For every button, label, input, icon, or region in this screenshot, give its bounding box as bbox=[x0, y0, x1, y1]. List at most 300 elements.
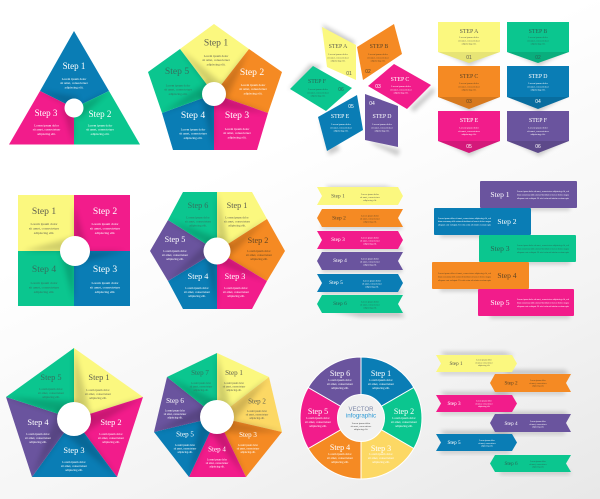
step 1: Lorem ipsum dolor bbox=[30, 222, 58, 226]
small ribbon 5 bbox=[436, 434, 517, 451]
ribbon 4: Step 4 bbox=[333, 258, 347, 264]
ribbon 6: Step 6 bbox=[333, 301, 347, 307]
step 2 bbox=[86, 109, 115, 136]
card C: STEP C bbox=[460, 74, 478, 80]
step 5: sit amet, consectetuer bbox=[38, 391, 64, 396]
card A: sit amet, consectetuer bbox=[458, 39, 480, 42]
tile E: Lorem ipsum dolor bbox=[331, 123, 351, 126]
step 1: adipiscing elit. bbox=[228, 224, 246, 228]
step 1: sit amet, consectetuer bbox=[85, 392, 111, 397]
step 3: adipiscing elit. bbox=[372, 460, 390, 464]
ribbon 2: Step 2 bbox=[332, 216, 346, 222]
ribbon 2: Lorem ipsum dolor bbox=[361, 216, 379, 218]
card F: 06 bbox=[535, 144, 541, 150]
ribbon 3: sit amet, consectetuer bbox=[360, 240, 380, 242]
card C: sit amet, consectetuer bbox=[458, 85, 480, 88]
tile B: Lorem ipsum dolor bbox=[368, 53, 388, 56]
panel: pentagon diagram bottom bbox=[6, 348, 143, 477]
card C bbox=[438, 66, 500, 109]
step 1: adipiscing elit. bbox=[207, 62, 226, 66]
step 2: adipiscing elit. bbox=[244, 91, 263, 95]
step 5: sit amet, consectetuer bbox=[174, 448, 196, 450]
step 3: Lorem ipsum dolor bbox=[238, 444, 258, 447]
step 3: Step 3 bbox=[371, 444, 391, 453]
tile A: 01 bbox=[346, 71, 352, 77]
step 4: Lorem ipsum dolor bbox=[185, 286, 209, 290]
step 3: sit amet, consectetuer bbox=[368, 456, 394, 461]
step 5: Lorem ipsum dolor bbox=[306, 416, 330, 420]
step 2: adipiscing elit. bbox=[91, 132, 110, 136]
card A bbox=[438, 22, 500, 63]
step 3 bbox=[90, 264, 121, 294]
tile D: adipiscing elit. bbox=[375, 130, 390, 133]
ribbon 5 bbox=[317, 274, 403, 292]
card D: STEP D bbox=[529, 74, 547, 80]
step 1: sit amet, consectetuer bbox=[29, 226, 60, 232]
step 2 bbox=[239, 67, 268, 95]
step 3: sit amet, consectetuer bbox=[61, 464, 87, 469]
step 4: Lorem ipsum dolor bbox=[26, 432, 50, 436]
step 4: sit amet, consectetuer bbox=[29, 286, 60, 290]
bar 4: aliquam erat volutpat. Ut wisi enim ad minim veniam quis bbox=[438, 279, 491, 282]
step 1: Lorem ipsum dolor bbox=[86, 388, 110, 392]
small ribbon 5: sit amet, consectetuer bbox=[478, 443, 496, 445]
small ribbon 1: sit amet, consectetuer bbox=[475, 362, 493, 364]
tile B bbox=[365, 44, 389, 75]
step 1: adipiscing elit. bbox=[65, 85, 84, 89]
step 1: Lorem ipsum dolor bbox=[204, 54, 228, 58]
small ribbon 4: adipiscing elit. bbox=[532, 426, 544, 429]
step 3: Lorem ipsum dolor bbox=[62, 460, 86, 464]
step 2: sit amet, consectetuer bbox=[98, 436, 124, 441]
card A: Lorem ipsum dolor bbox=[459, 36, 479, 39]
step 5: adipiscing elit. bbox=[166, 257, 184, 261]
wheel hub: sit amet, consectetuer bbox=[351, 425, 372, 428]
step 3 bbox=[223, 272, 249, 298]
step 1 bbox=[29, 206, 60, 235]
card F bbox=[507, 111, 569, 153]
step 3: sit amet, consectetuer bbox=[223, 131, 252, 136]
step 3: Step 3 bbox=[239, 431, 257, 439]
small ribbon 3: adipiscing elit. bbox=[478, 405, 490, 408]
step 2: adipiscing elit. bbox=[250, 257, 268, 261]
tile F: STEP F bbox=[308, 79, 327, 85]
card F: sit amet, consectetuer bbox=[527, 130, 549, 133]
step 3: Lorem ipsum dolor bbox=[91, 281, 119, 285]
step 3: Step 3 bbox=[35, 108, 58, 118]
small ribbon 3 bbox=[436, 395, 517, 412]
tile F: sit amet, consectetuer bbox=[307, 91, 329, 94]
tile F: adipiscing elit. bbox=[311, 95, 326, 98]
step 4: adipiscing elit. bbox=[184, 136, 203, 140]
card B: STEP B bbox=[529, 29, 547, 35]
step 4 bbox=[327, 443, 353, 464]
wheel hub: infographic bbox=[346, 412, 376, 420]
step 1: sit amet, consectetuer bbox=[224, 220, 250, 224]
small ribbon 4: Step 4 bbox=[504, 421, 518, 427]
step 5: Lorem ipsum dolor bbox=[166, 84, 190, 88]
step 4: sit amet, consectetuer bbox=[184, 290, 210, 295]
step 2: Lorem ipsum dolor bbox=[247, 410, 267, 413]
tile B: 02 bbox=[365, 69, 371, 75]
bar 3: Lorem ipsum dolor sit amet, consectetuer adipiscing elit, sed bbox=[517, 244, 570, 247]
step 2: Lorem ipsum dolor bbox=[247, 249, 271, 253]
step 3 bbox=[237, 431, 259, 454]
bar 1: diam nonummy nibh euismod tincidunt ut laoreet dolore magna bbox=[517, 194, 569, 196]
step 5: Step 5 bbox=[165, 235, 185, 244]
tile D: 04 bbox=[369, 101, 375, 107]
tile E bbox=[330, 104, 354, 133]
small ribbon 5: Lorem ipsum dolor bbox=[479, 440, 495, 442]
step 4: sit amet, consectetuer bbox=[25, 436, 51, 441]
step 1: Step 1 bbox=[63, 61, 85, 71]
step 2: Step 2 bbox=[89, 109, 111, 119]
ribbon 1: Lorem ipsum dolor bbox=[361, 194, 379, 196]
ribbon 1: adipiscing elit. bbox=[363, 199, 377, 202]
step 2: sit amet, consectetuer bbox=[86, 128, 115, 133]
step 5 bbox=[164, 66, 193, 96]
step 3: sit amet, consectetuer bbox=[237, 448, 259, 450]
step 7: Lorem ipsum dolor bbox=[191, 382, 211, 385]
small ribbon 4: Lorem ipsum dolor bbox=[530, 421, 546, 423]
panel: ribbon list bbox=[317, 186, 405, 317]
step 6 bbox=[327, 369, 353, 390]
card B: 02 bbox=[535, 55, 541, 61]
step 4 bbox=[206, 446, 228, 468]
step 1: adipiscing elit. bbox=[372, 386, 390, 390]
small ribbon 2: Step 2 bbox=[504, 380, 518, 386]
step 3: sit amet, consectetuer bbox=[90, 286, 121, 290]
step 1 bbox=[368, 369, 394, 390]
step 4: Step 4 bbox=[208, 446, 226, 454]
step 2: Step 2 bbox=[93, 206, 117, 217]
panel: flower of six tiles bbox=[288, 24, 435, 156]
ribbon 2: sit amet, consectetuer bbox=[360, 218, 380, 220]
step 2 bbox=[246, 398, 268, 420]
card B: sit amet, consectetuer bbox=[527, 39, 549, 42]
small ribbon 6: Lorem ipsum dolor bbox=[530, 461, 546, 463]
small ribbon 6: sit amet, consectetuer bbox=[529, 464, 547, 466]
step 5: adipiscing elit. bbox=[309, 424, 327, 428]
step 5: adipiscing elit. bbox=[177, 451, 193, 454]
bar 2: diam nonummy nibh euismod tincidunt ut laoreet dolore magna bbox=[438, 220, 491, 223]
step 6: Step 6 bbox=[330, 369, 350, 378]
tile F: 06 bbox=[338, 87, 344, 93]
wheel hub: VECTOR bbox=[349, 407, 374, 413]
ribbon 1: sit amet, consectetuer bbox=[360, 197, 380, 199]
tile C: sit amet, consectetuer bbox=[390, 88, 412, 91]
step 6: sit amet, consectetuer bbox=[327, 382, 353, 387]
step 1: sit amet, consectetuer bbox=[368, 382, 394, 387]
step 2: sit amet, consectetuer bbox=[246, 253, 272, 258]
card F: STEP F bbox=[529, 118, 548, 124]
ribbon 4 bbox=[317, 252, 403, 270]
step 4: adipiscing elit. bbox=[209, 466, 225, 468]
ribbon 1: Step 1 bbox=[331, 194, 345, 200]
step 2: Lorem ipsum dolor bbox=[91, 222, 119, 226]
ribbon 4: adipiscing elit. bbox=[363, 264, 377, 266]
bar 5: Step 5 bbox=[490, 298, 510, 307]
step 2: adipiscing elit. bbox=[102, 440, 120, 444]
panel: square diagram bbox=[18, 195, 130, 306]
step 5: adipiscing elit. bbox=[42, 395, 60, 399]
step 6: Lorem ipsum dolor bbox=[165, 410, 185, 412]
panel: offset bars bbox=[432, 181, 577, 318]
tile D: Lorem ipsum dolor bbox=[372, 123, 392, 126]
step 5 bbox=[305, 407, 331, 428]
small ribbon 6: adipiscing elit. bbox=[532, 466, 544, 469]
icon: centre circle bbox=[60, 236, 90, 266]
bar 3: Step 3 bbox=[490, 244, 510, 253]
bar 4: Lorem ipsum dolor sit amet, consectetuer adipiscing elit, sed bbox=[438, 272, 492, 275]
ribbon 4: sit amet, consectetuer bbox=[360, 262, 380, 264]
tile E: adipiscing elit. bbox=[334, 130, 349, 133]
tile B: STEP B bbox=[370, 44, 388, 50]
step 6 bbox=[164, 397, 186, 420]
step 3 bbox=[33, 108, 61, 136]
step 4: sit amet, consectetuer bbox=[327, 456, 353, 461]
step 2: Lorem ipsum dolor bbox=[99, 432, 123, 436]
step 4: Lorem ipsum dolor bbox=[181, 128, 205, 132]
step 2 bbox=[391, 407, 417, 428]
small ribbon 2: adipiscing elit. bbox=[532, 385, 544, 388]
step 5: Step 5 bbox=[40, 373, 62, 382]
small ribbon 2: Lorem ipsum dolor bbox=[530, 380, 546, 382]
bar 4: Step 4 bbox=[497, 271, 517, 280]
card D: 04 bbox=[535, 99, 541, 105]
step 2: sit amet, consectetuer bbox=[90, 226, 121, 232]
step 6: adipiscing elit. bbox=[331, 386, 349, 390]
step 2: Lorem ipsum dolor bbox=[392, 416, 416, 420]
card D: sit amet, consectetuer bbox=[527, 85, 549, 88]
tile A: Lorem ipsum dolor bbox=[328, 53, 348, 56]
card D: adipiscing elit. bbox=[531, 89, 546, 92]
ribbon 5: adipiscing elit. bbox=[365, 286, 379, 288]
card B bbox=[507, 22, 569, 63]
step 2: adipiscing elit. bbox=[395, 424, 413, 428]
card C: adipiscing elit. bbox=[462, 89, 477, 92]
card A: adipiscing elit. bbox=[462, 43, 477, 46]
card C: Lorem ipsum dolor bbox=[459, 82, 479, 85]
icon: centre circle bbox=[204, 238, 230, 264]
small ribbon 4: sit amet, consectetuer bbox=[529, 424, 547, 426]
step 7: adipiscing elit. bbox=[193, 389, 209, 392]
step 1: sit amet, consectetuer bbox=[60, 81, 89, 86]
card D: Lorem ipsum dolor bbox=[528, 82, 548, 85]
tile A: sit amet, consectetuer bbox=[327, 56, 349, 59]
bar 4 bbox=[432, 262, 529, 289]
step 4: Lorem ipsum dolor bbox=[328, 452, 352, 456]
ribbon 4: Lorem ipsum dolor bbox=[361, 258, 379, 260]
small ribbon 5: adipiscing elit. bbox=[481, 445, 493, 448]
step 1: Step 1 bbox=[371, 369, 391, 378]
panel: staggered small ribbons bbox=[436, 352, 571, 474]
small ribbon 3: sit amet, consectetuer bbox=[475, 403, 493, 405]
step 4: Lorem ipsum dolor bbox=[207, 458, 227, 462]
step 5: sit amet, consectetuer bbox=[164, 88, 193, 93]
step 2: adipiscing elit. bbox=[249, 417, 265, 420]
tile D: STEP D bbox=[373, 114, 391, 120]
small ribbon 3: Step 3 bbox=[447, 401, 461, 407]
step 6 bbox=[185, 201, 211, 228]
step 3: Lorem ipsum dolor bbox=[224, 286, 248, 290]
panel: vector infographic wheel bbox=[300, 357, 422, 479]
tile D: sit amet, consectetuer bbox=[371, 126, 393, 129]
bar 2 bbox=[434, 208, 531, 235]
step 2 bbox=[90, 206, 121, 235]
card A: 01 bbox=[466, 55, 472, 61]
ribbon 2 bbox=[317, 209, 403, 227]
tile B: adipiscing elit. bbox=[371, 60, 386, 63]
step 6: Lorem ipsum dolor bbox=[186, 216, 210, 220]
bar 5: aliquam erat volutpat. Ut wisi enim ad minim veniam quis bbox=[517, 305, 569, 308]
step 5: Lorem ipsum dolor bbox=[39, 387, 63, 391]
step 5: sit amet, consectetuer bbox=[305, 420, 331, 425]
tile C: STEP C bbox=[391, 77, 409, 83]
panel: arrow cards bbox=[438, 22, 569, 156]
step 1: Lorem ipsum dolor bbox=[224, 382, 244, 385]
step 6: Step 6 bbox=[166, 397, 184, 405]
step 3: sit amet, consectetuer bbox=[223, 290, 249, 295]
tile A: STEP A bbox=[329, 44, 348, 50]
step 5: Step 5 bbox=[165, 66, 189, 77]
small ribbon 3: Lorem ipsum dolor bbox=[476, 400, 492, 402]
bar 2: aliquam erat volutpat. Ut wisi enim ad minim veniam quis bbox=[438, 224, 491, 226]
step 1 bbox=[202, 38, 231, 66]
step 3: Step 3 bbox=[225, 110, 249, 121]
step 4: adipiscing elit. bbox=[29, 440, 47, 444]
step 1: adipiscing elit. bbox=[89, 396, 107, 400]
step 3 bbox=[368, 444, 394, 464]
step 4: Step 4 bbox=[181, 110, 205, 121]
step 3: Step 3 bbox=[63, 446, 85, 455]
small ribbon 4 bbox=[490, 414, 571, 432]
card F: adipiscing elit. bbox=[531, 133, 546, 136]
ribbon 3: Step 3 bbox=[331, 237, 345, 243]
step 5: Lorem ipsum dolor bbox=[163, 249, 187, 253]
step 3: Lorem ipsum dolor bbox=[34, 124, 59, 128]
small ribbon 2: sit amet, consectetuer bbox=[529, 383, 547, 385]
tile C: adipiscing elit. bbox=[394, 92, 409, 95]
step 2: Step 2 bbox=[240, 67, 264, 78]
bar 3: diam nonummy nibh euismod tincidunt ut laoreet dolore magna bbox=[517, 248, 569, 250]
step 6: sit amet, consectetuer bbox=[185, 220, 211, 224]
icon: centre circle bbox=[57, 402, 91, 436]
wheel hub: Lorem ipsum dolor bbox=[352, 422, 370, 425]
step 1 bbox=[224, 201, 250, 228]
step 1: adipiscing elit. bbox=[34, 231, 54, 235]
step 1: Step 1 bbox=[225, 369, 243, 377]
step 7: sit amet, consectetuer bbox=[190, 386, 212, 388]
step 4: sit amet, consectetuer bbox=[206, 462, 228, 465]
ribbon 6: sit amet, consectetuer bbox=[360, 304, 380, 306]
step 2: Step 2 bbox=[248, 398, 266, 406]
step 6: Lorem ipsum dolor bbox=[328, 378, 352, 382]
ribbon 3: Lorem ipsum dolor bbox=[361, 238, 379, 240]
tile E: STEP E bbox=[331, 114, 350, 120]
step 5: sit amet, consectetuer bbox=[162, 253, 188, 258]
step 3 bbox=[61, 446, 87, 472]
small ribbon 1: Step 1 bbox=[449, 361, 463, 367]
tile A bbox=[327, 44, 352, 77]
card D bbox=[507, 66, 569, 109]
step 4: Step 4 bbox=[330, 443, 350, 452]
card A: STEP A bbox=[460, 29, 479, 35]
step 2: sit amet, consectetuer bbox=[239, 87, 268, 92]
tile C: Lorem ipsum dolor bbox=[391, 85, 411, 88]
step 1: Step 1 bbox=[227, 201, 247, 210]
step 1 bbox=[223, 369, 245, 392]
wheel hub: adipiscing elit. bbox=[354, 428, 368, 431]
tile D bbox=[369, 101, 393, 133]
step 1: Lorem ipsum dolor bbox=[369, 378, 393, 382]
bar 4: diam nonummy nibh euismod tincidunt ut laoreet dolore magna bbox=[438, 276, 491, 278]
step 2: adipiscing elit. bbox=[95, 231, 115, 235]
bar 2: Step 2 bbox=[497, 217, 517, 226]
step 4: adipiscing elit. bbox=[188, 294, 206, 298]
bar 5: diam nonummy nibh euismod tincidunt ut laoreet dolore magna bbox=[517, 302, 569, 304]
step 3: sit amet, consectetuer bbox=[33, 128, 61, 133]
step 1: adipiscing elit. bbox=[226, 389, 242, 392]
step 4 bbox=[179, 110, 208, 140]
step 5 bbox=[162, 235, 188, 261]
step 7 bbox=[190, 369, 212, 392]
step 2: Step 2 bbox=[394, 407, 414, 416]
card E bbox=[438, 111, 500, 153]
tile F bbox=[307, 79, 344, 98]
card B: Lorem ipsum dolor bbox=[528, 36, 548, 39]
tile E: 05 bbox=[348, 104, 354, 110]
step 2: Lorem ipsum dolor bbox=[241, 83, 265, 87]
panel: triangle diagram bbox=[9, 31, 140, 144]
card E: sit amet, consectetuer bbox=[458, 130, 480, 133]
step 4: Step 4 bbox=[32, 264, 56, 275]
card C: 03 bbox=[466, 99, 472, 105]
step 5: Step 5 bbox=[176, 430, 194, 438]
card B: adipiscing elit. bbox=[531, 43, 546, 46]
small ribbon 2 bbox=[490, 374, 571, 392]
step 4: adipiscing elit. bbox=[331, 460, 349, 464]
step 1: sit amet, consectetuer bbox=[202, 58, 231, 63]
step 1 bbox=[60, 61, 89, 89]
small ribbon 5: Step 5 bbox=[447, 440, 461, 446]
panel: pentagon diagram top bbox=[148, 24, 282, 150]
step 2: Lorem ipsum dolor bbox=[88, 124, 112, 128]
tile C: 03 bbox=[375, 84, 381, 90]
bar 1: Step 1 bbox=[490, 190, 510, 199]
step 3: adipiscing elit. bbox=[227, 294, 245, 298]
step 3: Step 3 bbox=[93, 264, 117, 275]
step 5 bbox=[174, 430, 196, 454]
step 6: sit amet, consectetuer bbox=[164, 413, 186, 416]
ribbon 3: adipiscing elit. bbox=[363, 242, 377, 246]
step 4: adipiscing elit. bbox=[34, 290, 54, 294]
step 7: Step 7 bbox=[191, 369, 209, 377]
bar 2: Lorem ipsum dolor sit amet, consectetuer adipiscing elit, sed bbox=[438, 217, 492, 220]
step 5: Lorem ipsum dolor bbox=[175, 444, 195, 447]
ribbon 3 bbox=[317, 231, 403, 249]
step 2 bbox=[98, 418, 124, 444]
step 1: Step 1 bbox=[88, 373, 110, 382]
tile C bbox=[375, 77, 412, 95]
card E: Lorem ipsum dolor bbox=[459, 126, 479, 130]
small ribbon 1: adipiscing elit. bbox=[478, 364, 490, 367]
step 3: adipiscing elit. bbox=[37, 132, 56, 136]
ribbon 6: adipiscing elit. bbox=[363, 306, 377, 310]
small ribbon 6: Step 6 bbox=[504, 461, 518, 467]
bar 1: aliquam erat volutpat. Ut wisi enim ad minim veniam quis bbox=[517, 197, 569, 200]
panel: heptagon diagram bbox=[154, 353, 282, 477]
